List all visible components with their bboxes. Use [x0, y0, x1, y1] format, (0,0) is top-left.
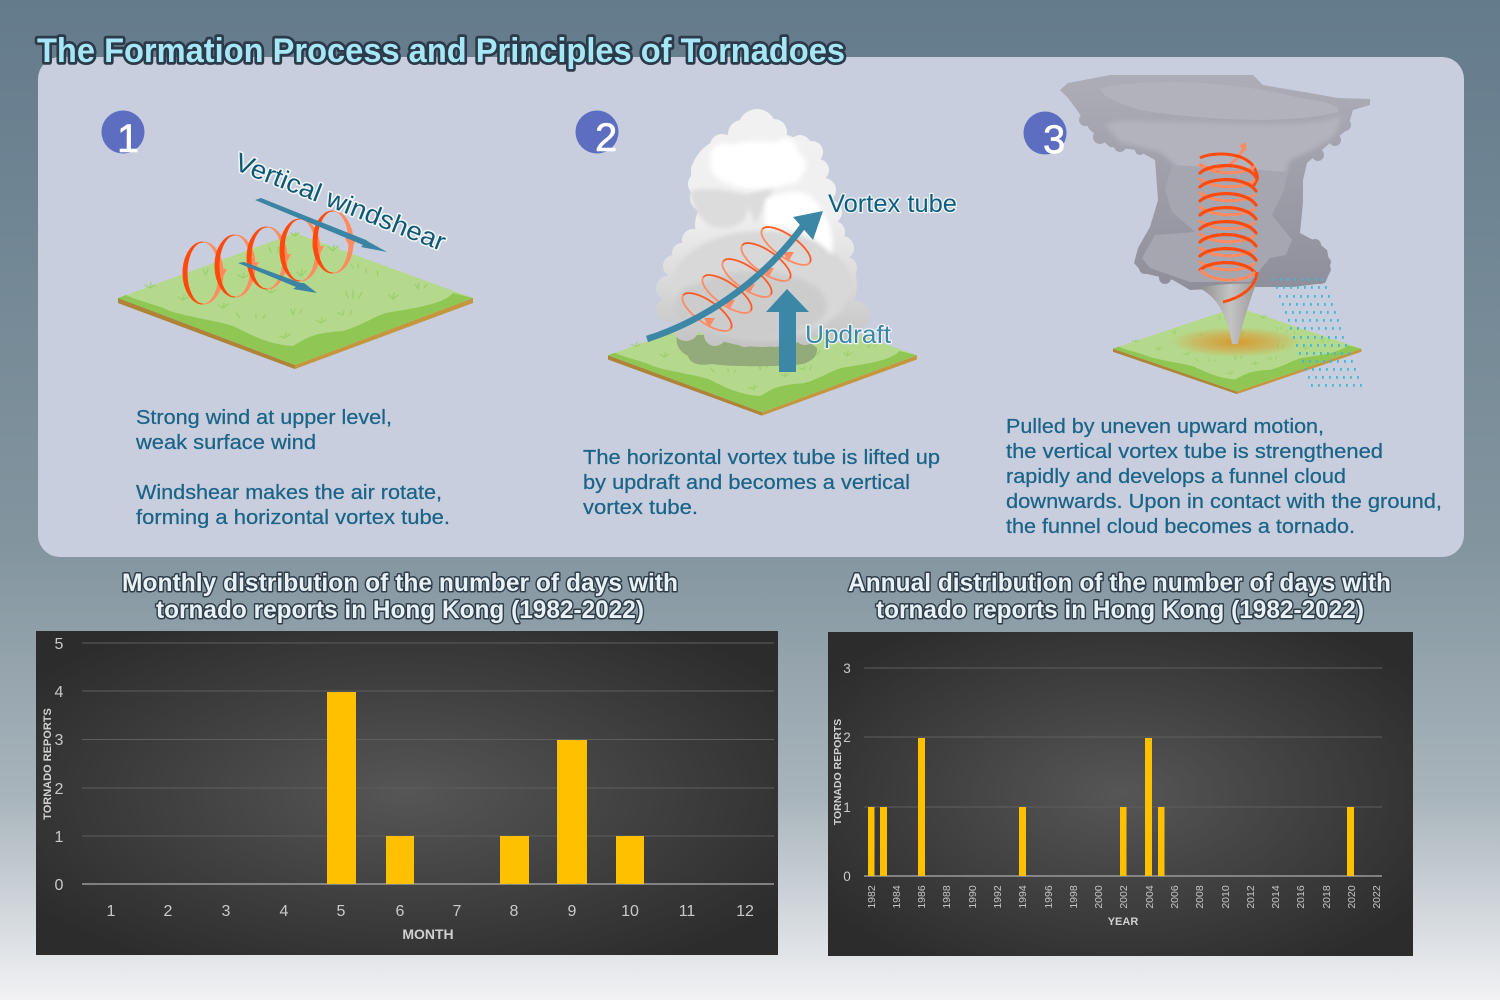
text: step 3 description: Pulled by uneven upward motion,	[1006, 416, 1324, 438]
illustration: storm cloud with anvil	[1060, 75, 1370, 290]
annual y axis labels	[843, 661, 851, 884]
panel: step 1 vertical windshear	[102, 110, 473, 529]
monthly x axis labels: 1	[107, 903, 116, 920]
monthly x axis labels	[107, 903, 754, 920]
annual x axis labels: 1988	[941, 885, 953, 909]
illustration: cloud shadow on ground	[677, 335, 817, 366]
label: vertical windshear: Vertical windshear	[231, 147, 451, 257]
text: step 1 description: Strong wind at upper level,	[136, 407, 392, 429]
annual x axis labels: 2004	[1144, 885, 1156, 909]
illustration: cumulonimbus cloud	[656, 109, 870, 347]
monthly x axis labels: 12	[736, 903, 754, 920]
arrow: upper level strong wind	[255, 198, 387, 252]
annual x axis labels: 1994	[1017, 885, 1029, 909]
monthly x axis labels: 10	[621, 903, 639, 920]
monthly y axis labels: 2	[55, 781, 64, 798]
text: step 3 description: downwards. Upon in contact with the ground,	[1006, 491, 1442, 513]
panel: step 3 tornado formation	[1006, 75, 1442, 538]
illustration: funnel cloud	[1199, 284, 1256, 344]
monthly x axis labels: 3	[222, 903, 231, 920]
monthly x axis labels: 7	[453, 903, 462, 920]
annual x axis labels: 1986	[916, 885, 928, 909]
heading: monthly chart title: Monthly distribution of the number of days with	[122, 569, 678, 597]
annual y axis labels: 1	[843, 800, 851, 815]
illustration: rain	[1273, 278, 1362, 387]
monthly y axis labels: 4	[55, 684, 64, 701]
annual x axis labels: 2014	[1270, 885, 1282, 909]
bar chart: monthly distribution	[36, 631, 778, 955]
annual axis titles: YEAR	[1108, 916, 1138, 928]
annual y axis labels: 3	[843, 661, 851, 676]
annual x axis labels: 2016	[1295, 885, 1307, 909]
annual x axis labels: 2020	[1346, 885, 1358, 909]
monthly axis titles: TORNADO REPORTS	[42, 708, 54, 820]
annual x axis labels: 1992	[992, 885, 1004, 909]
text: step 3 description: rapidly and develops a funnel cloud	[1006, 466, 1346, 488]
illustration: grass platform 3	[1113, 306, 1362, 394]
monthly y axis labels: 1	[55, 829, 64, 846]
monthly y axis labels	[55, 636, 64, 894]
illustration: grass platform 2	[608, 299, 917, 416]
illustration: horizontal vortex rings	[183, 211, 357, 304]
title: The Formation Process and Principles of Tornadoes	[37, 32, 845, 70]
illustration: grass platform 1	[118, 232, 473, 369]
illustration: tilted vortex rings	[675, 220, 816, 341]
text: step 2 description	[583, 447, 940, 519]
annual axis titles	[832, 719, 1138, 928]
icon: number badge 1	[102, 110, 144, 161]
illustration: dust cloud at tornado base	[1170, 327, 1302, 357]
annual x axis labels: 2008	[1194, 885, 1206, 909]
monthly x axis labels: 4	[280, 903, 289, 920]
text: step 1 description: weak surface wind	[135, 432, 316, 454]
annual x axis labels: 2010	[1220, 885, 1232, 909]
annual x axis labels: 1998	[1068, 885, 1080, 909]
monthly axis titles	[42, 708, 454, 942]
icon: number badge 3	[1024, 112, 1066, 162]
annual x axis labels: 2022	[1371, 885, 1383, 909]
icon: number badge 2	[576, 110, 618, 160]
annual x axis labels: 2000	[1093, 885, 1105, 909]
bar chart: annual distribution	[828, 632, 1413, 956]
annual x axis labels: 2006	[1169, 885, 1181, 909]
heading: annual chart title	[848, 569, 1391, 624]
text: step 3 description	[1006, 416, 1442, 538]
text: step 3 description: the vertical vortex tube is strengthened	[1006, 441, 1383, 463]
text: step 3 description: the funnel cloud becomes a tornado.	[1006, 516, 1355, 538]
icon: number badge 3: 3	[1043, 118, 1065, 162]
text: step 1 description: forming a horizontal vortex tube.	[136, 507, 450, 529]
text: step 2 description: The horizontal vortex tube is lifted up	[583, 447, 940, 469]
annual axis titles: TORNADO REPORTS	[832, 719, 844, 825]
arrow: updraft	[766, 289, 809, 372]
text: step 2 description: vortex tube.	[583, 497, 698, 519]
heading: monthly chart title	[122, 569, 678, 624]
annual x axis labels: 2002	[1118, 885, 1130, 909]
monthly y axis labels: 3	[55, 732, 64, 749]
annual x axis labels: 2012	[1245, 885, 1257, 909]
monthly x axis labels: 2	[164, 903, 173, 920]
annual x axis labels	[866, 885, 1383, 909]
monthly y axis labels: 0	[55, 877, 64, 894]
annual x axis labels: 2018	[1321, 885, 1333, 909]
panel: step 2 updraft lifts vortex tube	[576, 109, 957, 519]
monthly x axis labels: 11	[679, 903, 695, 920]
monthly axis titles: MONTH	[402, 926, 454, 942]
illustration: vertical vortex coil	[1200, 142, 1257, 302]
monthly x axis labels: 6	[396, 903, 405, 920]
annual x axis labels: 1990	[967, 885, 979, 909]
arrow: rising vortex tube	[647, 211, 823, 339]
arrow: weak surface wind	[238, 262, 317, 293]
heading: annual chart title: tornado reports in Hong Kong (1982-2022)	[876, 596, 1364, 624]
monthly x axis labels: 9	[568, 903, 577, 920]
monthly y axis labels: 5	[55, 636, 64, 653]
annual y axis labels: 0	[843, 869, 851, 884]
icon: number badge 1: 1	[117, 117, 139, 161]
annual x axis labels: 1984	[891, 885, 903, 909]
icon: number badge 2: 2	[595, 116, 617, 160]
monthly bars	[327, 692, 644, 884]
annual y axis labels: 2	[843, 730, 851, 745]
annual x axis labels: 1996	[1043, 885, 1055, 909]
monthly x axis labels: 8	[510, 903, 519, 920]
heading: monthly chart title: tornado reports in Hong Kong (1982-2022)	[156, 596, 644, 624]
text: step 1 description: Windshear makes the air rotate,	[136, 482, 442, 504]
panel: formation process	[38, 57, 1464, 557]
text: step 1 description	[135, 407, 450, 529]
annual bars	[868, 738, 1354, 876]
label: updraft: Updraft	[805, 321, 891, 349]
heading: annual chart title: Annual distribution of the number of days with	[848, 569, 1391, 597]
monthly x axis labels: 5	[337, 903, 346, 920]
text: step 2 description: by updraft and becomes a vertical	[583, 472, 910, 494]
label: vortex tube: Vortex tube	[828, 190, 957, 218]
annual x axis labels: 1982	[866, 885, 878, 909]
